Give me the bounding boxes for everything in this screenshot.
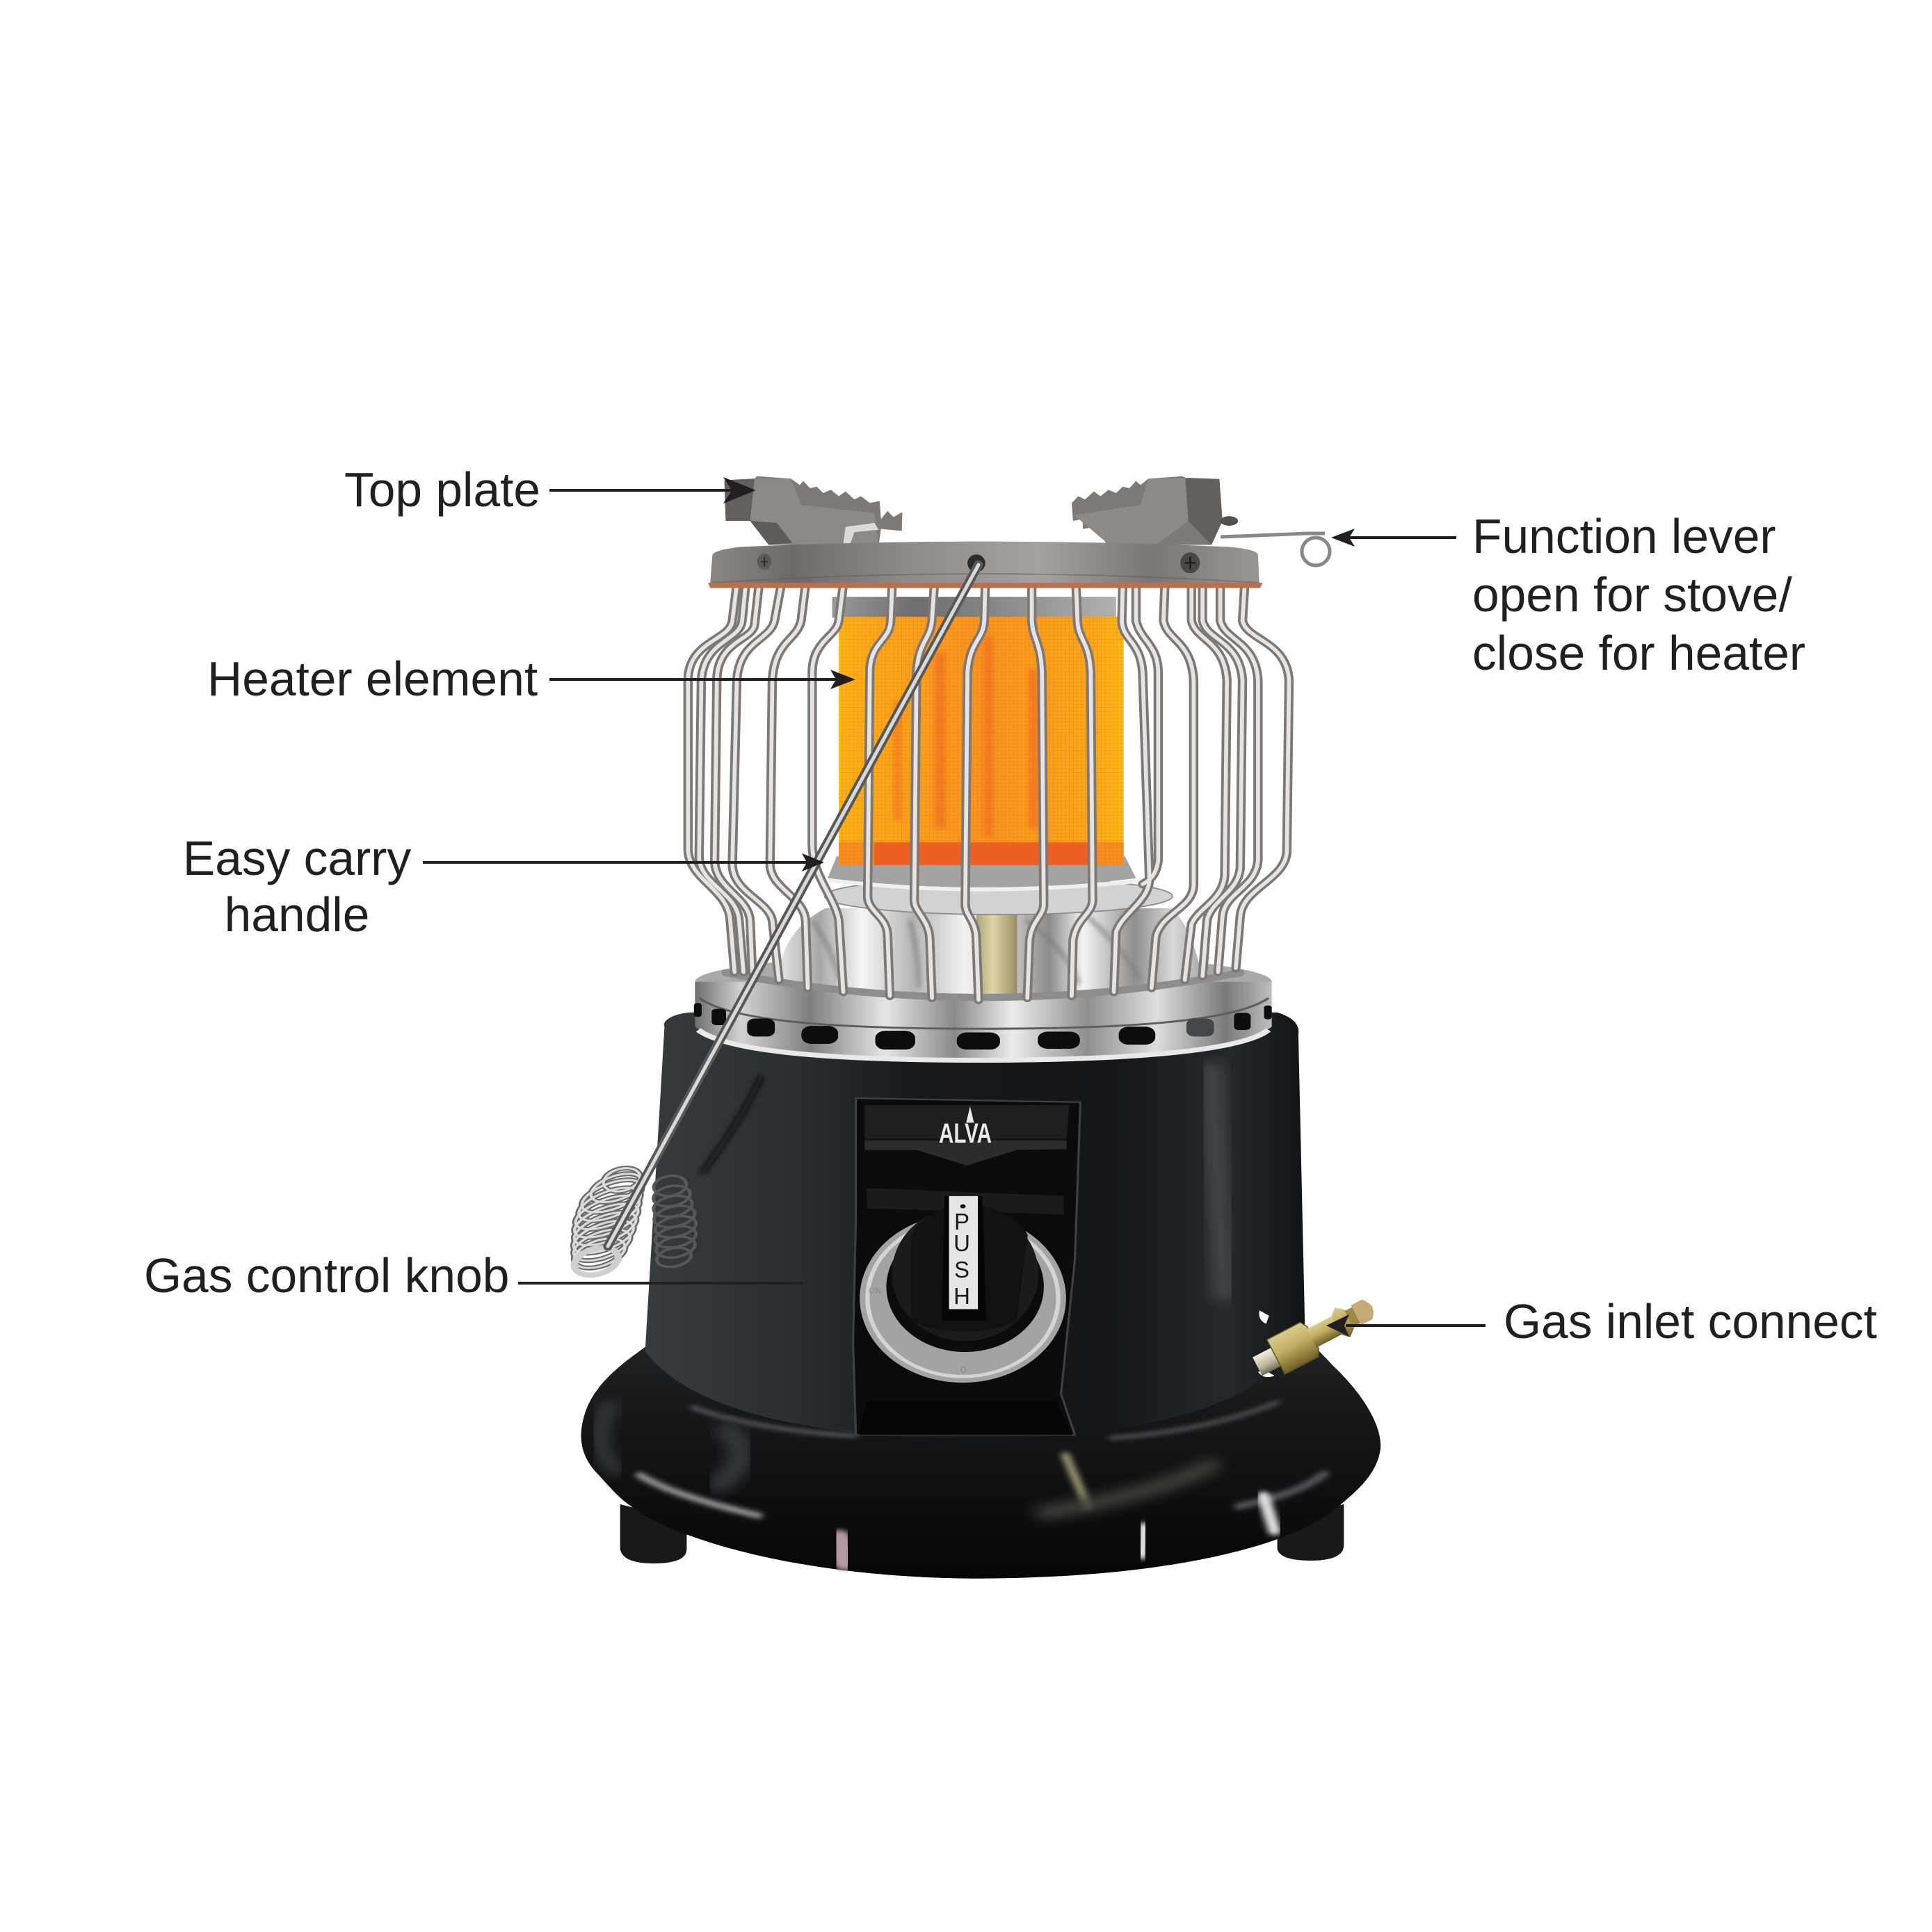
label: easy carry handle: Easy carry [183, 831, 411, 885]
knob dial ring [860, 1214, 1066, 1383]
heater element top collar [832, 597, 1116, 618]
right foot [1278, 1504, 1344, 1561]
body highlights [702, 1063, 1225, 1301]
control panel [853, 1098, 1081, 1435]
chrome burner ring [695, 953, 1272, 1063]
label: gas control knob: Gas control knob [144, 1248, 509, 1303]
label: heater element [207, 652, 855, 706]
label: top plate: Top plate [344, 462, 540, 517]
spring handle [566, 1164, 649, 1280]
body shell [645, 1013, 1305, 1439]
label: function lever: open for stove/ [1472, 567, 1792, 622]
chrome reflector [777, 856, 1202, 995]
function lever [1221, 533, 1330, 565]
label: gas inlet connect: Gas inlet connect [1504, 1294, 1877, 1349]
rim of chrome ring [726, 973, 1240, 997]
left foot [620, 1504, 686, 1563]
plate screw left [757, 554, 771, 570]
glowing heater element [839, 617, 1124, 865]
heater base and black body [566, 953, 1380, 1579]
handle hole [967, 554, 985, 572]
guard wires [688, 585, 1289, 1000]
flame mark [966, 1106, 974, 1122]
label: easy carry handle: handle [225, 887, 369, 942]
push label: U [953, 1230, 970, 1256]
label: function lever [1331, 509, 1805, 680]
plate screw right [1180, 552, 1200, 573]
dial markings: ON [869, 1286, 881, 1296]
gas inlet connector [1248, 1289, 1381, 1384]
label: gas inlet connect [1326, 1294, 1877, 1349]
label: easy carry handle [183, 831, 824, 942]
push label: P [954, 1209, 969, 1234]
gas inlet opening [1258, 1310, 1275, 1377]
push label: S [954, 1257, 969, 1282]
heater illustration [566, 476, 1381, 1579]
left top plate support [725, 476, 902, 545]
spring handle shadow [650, 1173, 700, 1270]
push label: H [953, 1283, 970, 1309]
vent slots [694, 1003, 1272, 1049]
brand logo: ALVA [939, 1118, 992, 1149]
right top plate support [1072, 476, 1238, 545]
flared base [581, 1259, 1380, 1579]
control knob [892, 1196, 1038, 1341]
base highlights [601, 1402, 1324, 1561]
label: heater element: Heater element [207, 652, 538, 706]
upper heater assembly [688, 476, 1289, 1000]
push label [953, 1209, 970, 1309]
label: top plate [344, 462, 756, 517]
label: function lever: Function lever [1472, 509, 1776, 563]
dial markings: 0 [960, 1364, 966, 1376]
carry handle rod [608, 565, 979, 1246]
label: function lever: close for heater [1472, 626, 1805, 680]
top plate ring [708, 542, 1262, 588]
dial markings [869, 1286, 966, 1376]
